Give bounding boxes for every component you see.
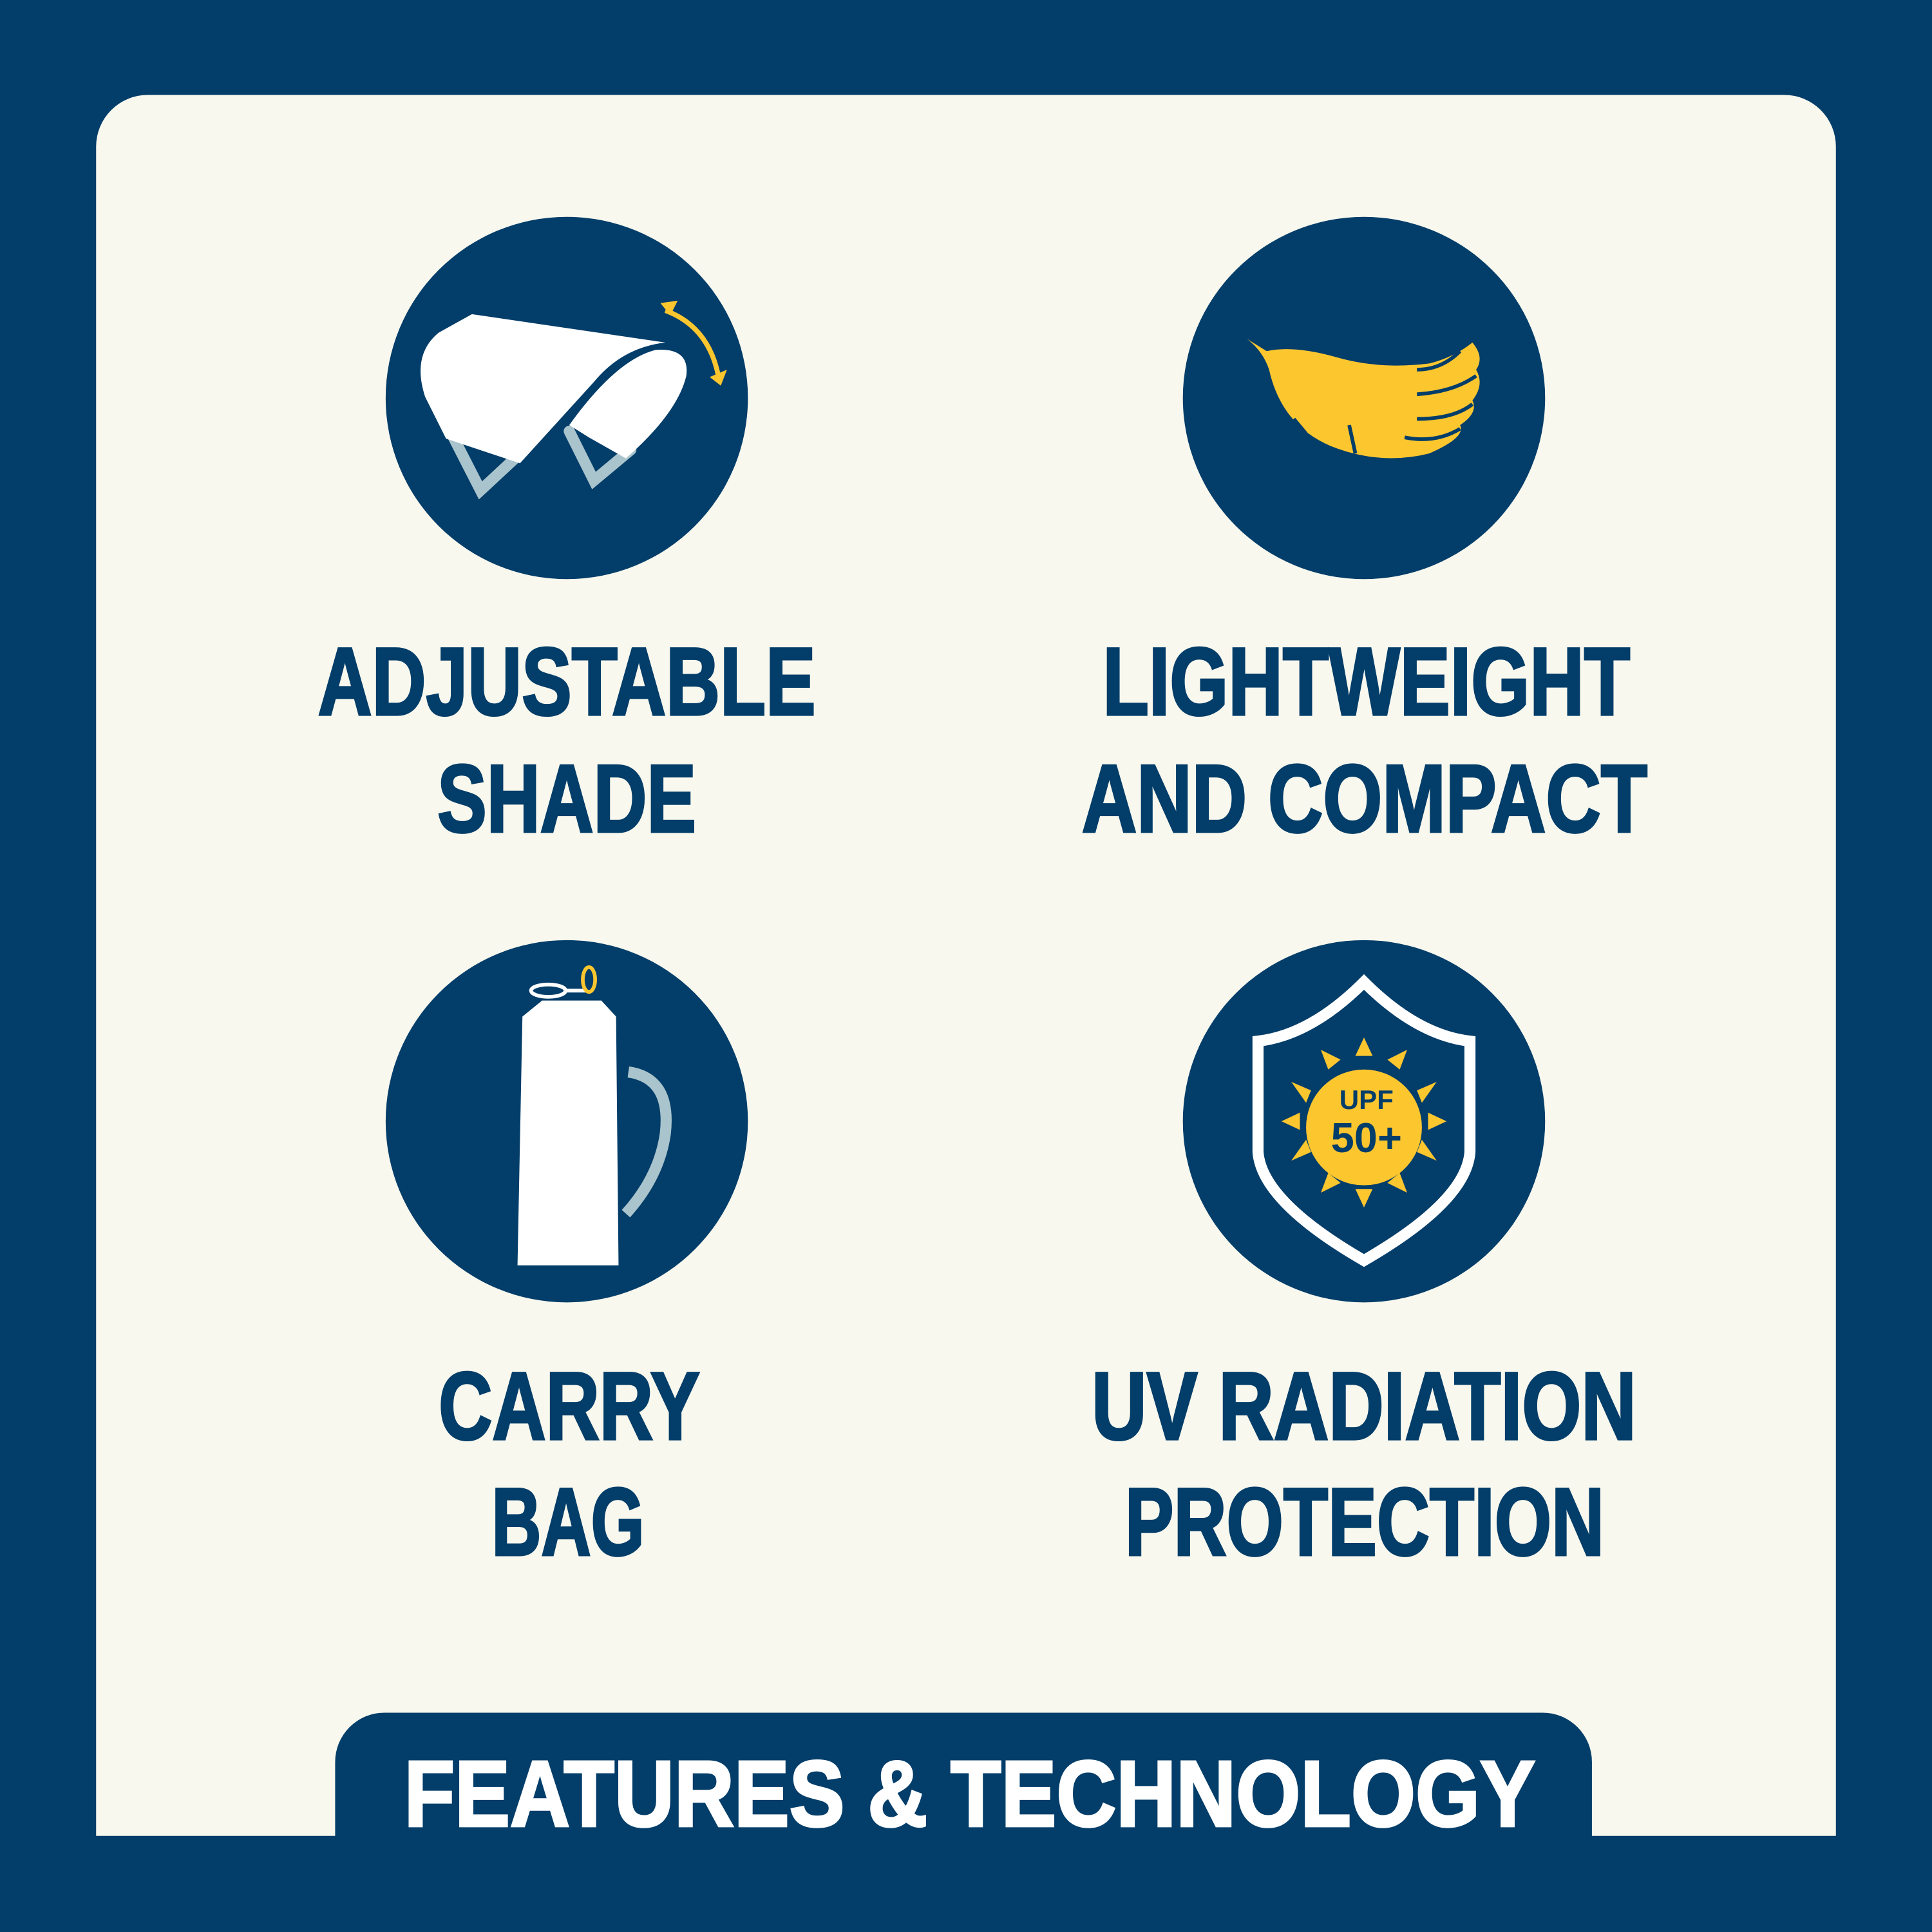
- icon: adjustable shade: [386, 217, 748, 579]
- heading: lightweight: LIGHTWEIGHT: [1103, 628, 1630, 735]
- icon: feather: [1183, 217, 1545, 579]
- heading: adjustable shade: ADJUSTABLE: [318, 628, 816, 735]
- icon: carry bag: [386, 940, 748, 1302]
- heading: carry bag: CARRY: [439, 1352, 700, 1460]
- heading: uv protection: PROTECTION: [1125, 1468, 1604, 1576]
- heading: adjustable shade: [318, 628, 816, 852]
- heading: uv protection: UV RADIATION: [1092, 1352, 1636, 1460]
- footer tab: features & technology: FEATURES & TECHNOLOGY: [404, 1741, 1535, 1846]
- heading: carry bag: BAG: [491, 1468, 645, 1576]
- footer tab: features & technology: [335, 1712, 1592, 1932]
- icon: UV shield: UPF: [1340, 1084, 1394, 1115]
- icon: UV shield: 50+: [1331, 1114, 1402, 1161]
- heading: lightweight: AND COMPACT: [1082, 744, 1647, 852]
- heading: carry bag: [439, 1352, 700, 1576]
- icon: UV shield: [1183, 940, 1545, 1302]
- heading: adjustable shade: SHADE: [437, 744, 696, 852]
- heading: lightweight: [1082, 628, 1647, 852]
- heading: uv protection: [1092, 1352, 1636, 1576]
